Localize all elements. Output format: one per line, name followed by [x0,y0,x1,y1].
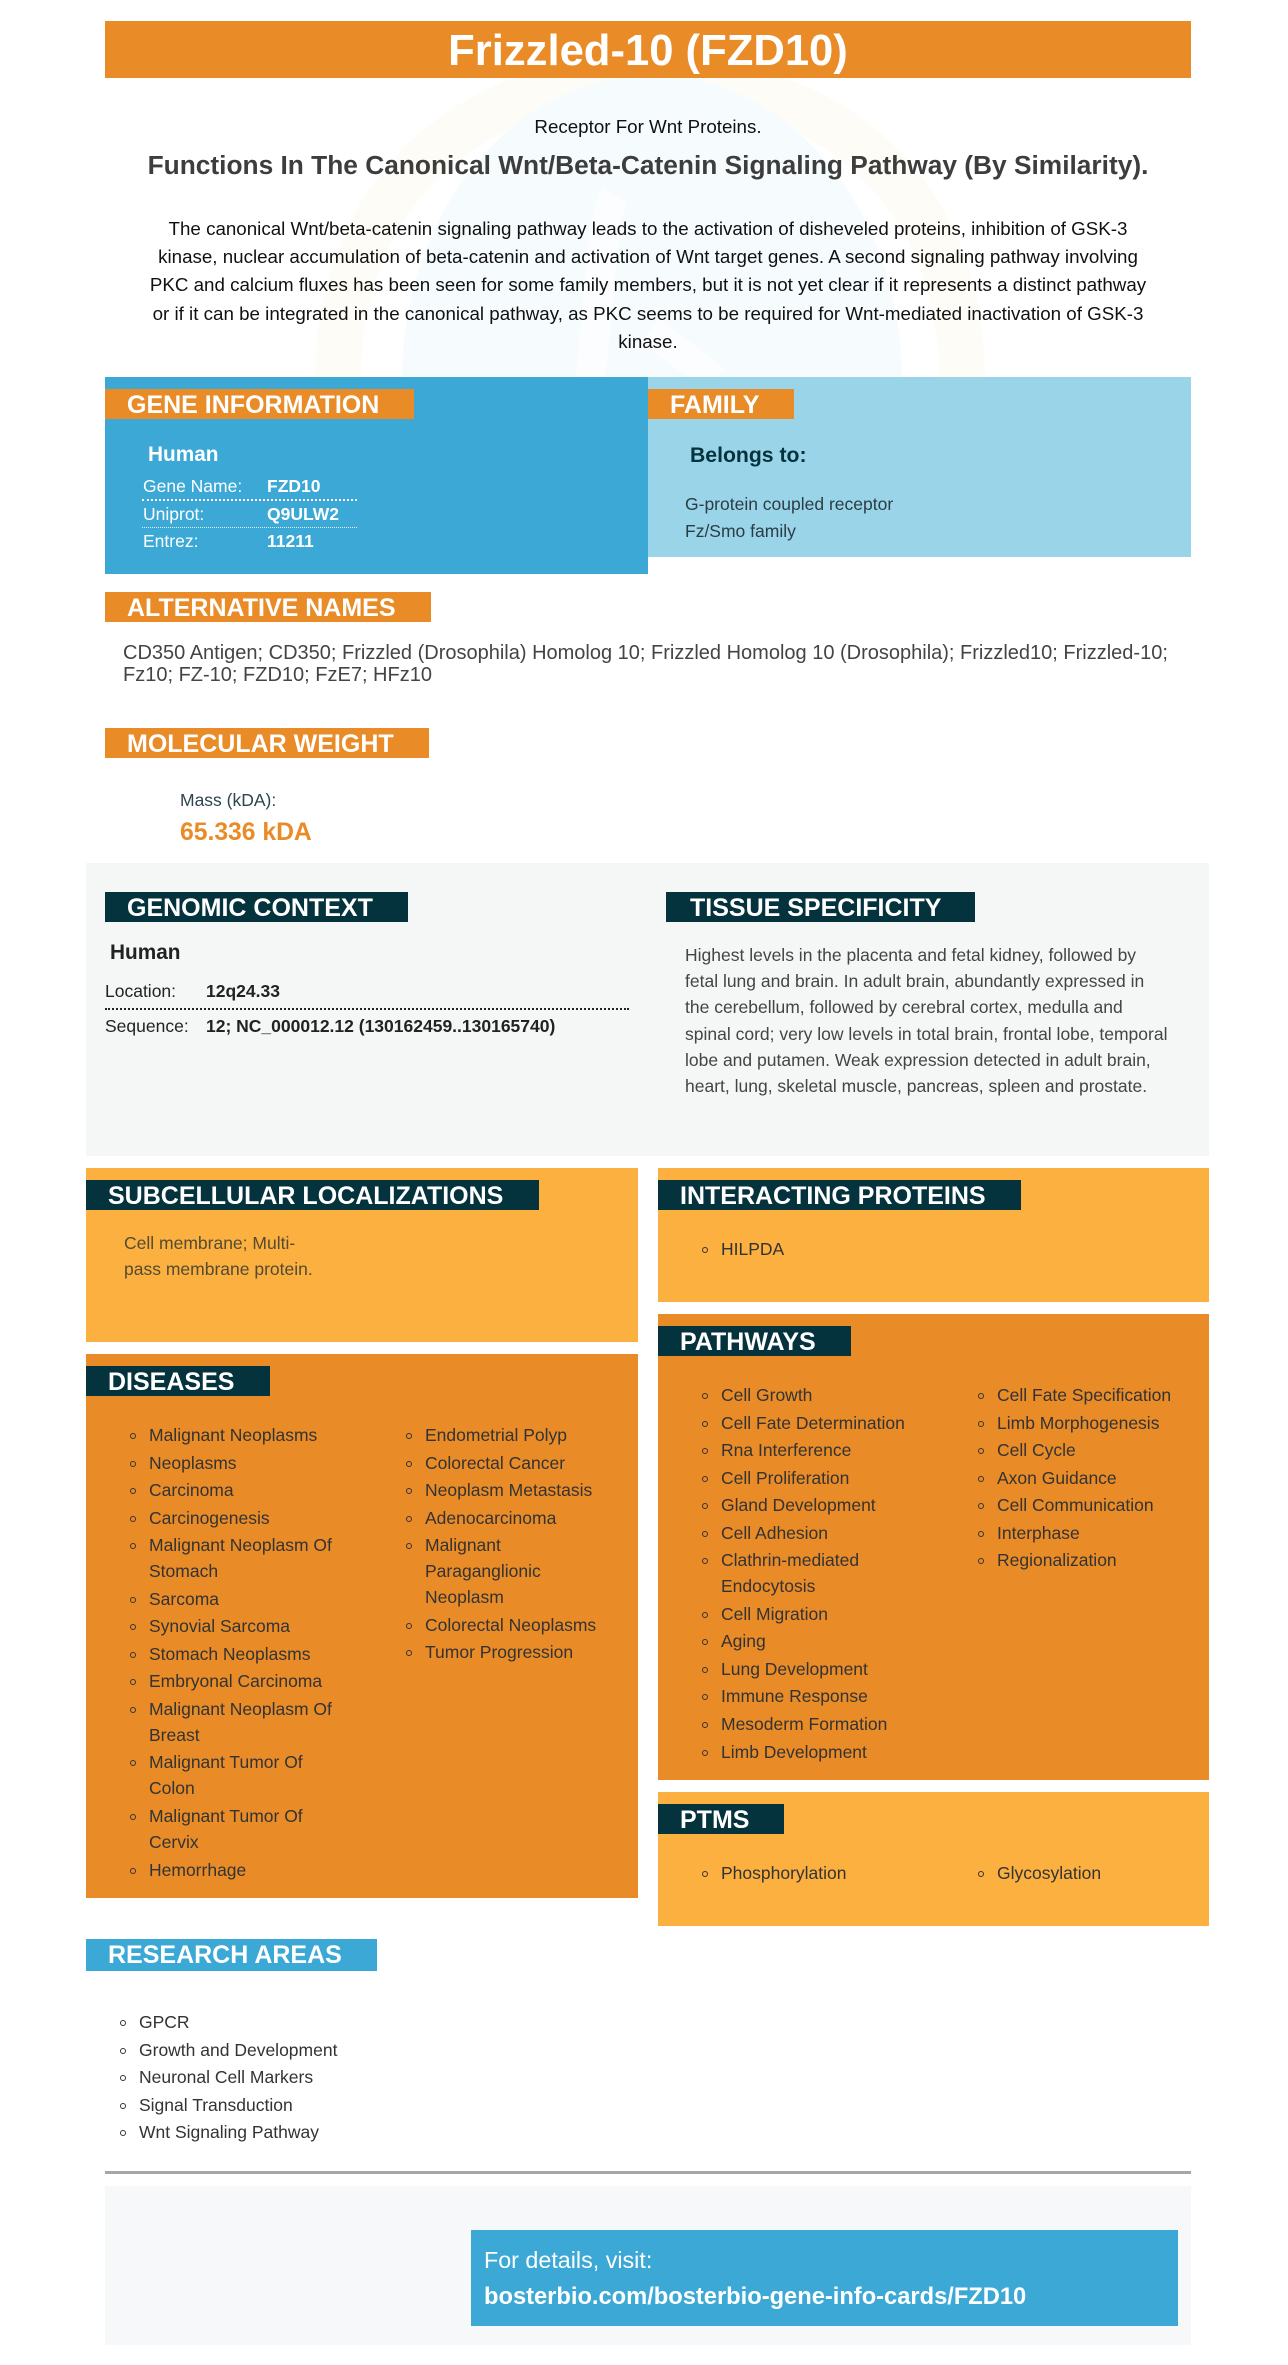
pathway list column 1: Gland Development [721,1495,876,1515]
panel: gene information [105,377,648,574]
localization text [124,1233,313,1279]
location row [105,981,280,1001]
disease list column 2: Neoplasm Metastasis [425,1480,592,1500]
tissue specificity text: spinal cord; very low levels in total brain, frontal lobe, temporal [685,1024,1167,1044]
disease list column 1: Embryonal Carcinoma [149,1671,322,1691]
pathway list column 1: Mesoderm Formation [721,1714,887,1734]
panel: gene information: 11211 [267,531,314,551]
disease list column 1: Neoplasms [149,1453,237,1473]
uniprot row [143,504,339,524]
mass value: 65.336 kDA [180,819,312,846]
disease list column 2: Neoplasm [425,1587,504,1607]
heading: family: FAMILY [670,391,759,419]
heading: subcellular localizations: SUBCELLULAR LOCALIZATIONS [108,1182,503,1210]
panel: pathways [658,1314,1209,1780]
heading: diseases: DISEASES [108,1368,234,1396]
disease list column 1: Malignant Tumor Of [149,1806,303,1826]
pathway list column 2: Limb Morphogenesis [997,1413,1159,1433]
entrez row: Entrez: [143,531,198,551]
pathway list column 1: Cell Growth [721,1385,812,1405]
callout label: For details, visit: [484,2247,652,2273]
research areas list: Neuronal Cell Markers [139,2067,313,2087]
title banner: Frizzled-10 (FZD10) [448,27,848,75]
pathway list column 1: Limb Development [721,1742,867,1762]
alternative names text [123,642,1168,686]
sequence row: Sequence: [105,1016,189,1036]
family list: G-protein coupled receptor [685,494,893,514]
panel: genomic context and tissue specificity: 12q24.33 [206,981,280,1001]
pathway list column 1: Lung Development [721,1659,868,1679]
alternative names text: CD350 Antigen; CD350; Frizzled (Drosophila) Homolog 10; Frizzled Homolog 10 (Drosophila); Frizzled10; Frizzled-10; [123,642,1168,664]
heading: tissue specificity: TISSUE SPECIFICITY [690,894,941,922]
heading: gene information: GENE INFORMATION [127,391,379,419]
panel: genomic context and tissue specificity: 12; NC_000012.12 (130162459..130165740) [206,1016,555,1036]
species: Human [148,443,218,466]
panel: gene information: Q9ULW2 [267,504,339,524]
tissue specificity text [685,945,1167,1096]
panel: diseases [86,1354,638,1898]
pathway list column 1: Clathrin-mediated [721,1550,859,1570]
heading: pathways: PATHWAYS [680,1328,816,1356]
pathway list column 2 [978,1385,1171,1570]
ptm list column 2: Glycosylation [997,1863,1101,1883]
description [150,218,1146,352]
disease list column 1: Malignant Neoplasm Of [149,1699,332,1719]
pathway list column 1: Immune Response [721,1686,868,1706]
research areas list: Signal Transduction [139,2095,293,2115]
disease list column 1: Colon [149,1778,195,1798]
family list [685,494,893,541]
pathway list column 1: Endocytosis [721,1576,815,1596]
panel: gene information: FZD10 [267,476,320,496]
background watermark [316,78,984,377]
panel: footer [105,2186,1191,2345]
tissue specificity text: the cerebellum, followed by cerebral cortex, medulla and [685,997,1123,1017]
entrez row [143,531,314,551]
pathway list column 1: Cell Fate Determination [721,1413,905,1433]
heading: alternative names: ALTERNATIVE NAMES [127,594,396,622]
description: kinase. [618,331,678,352]
callout url: bosterbio.com/bosterbio-gene-info-cards/FZD10 [484,2284,1026,2310]
location row: Location: [105,981,176,1001]
panel: genomic context and tissue specificity [86,863,1209,1156]
disease list column 1: Malignant Neoplasm Of [149,1535,332,1555]
pathway list column 1: Cell Migration [721,1604,828,1624]
description: The canonical Wnt/beta-catenin signaling pathway leads to the activation of disheveled proteins, inhibition of GSK-3 [169,218,1127,239]
heading: molecular weight: MOLECULAR WEIGHT [127,730,394,758]
description: or if it can be integrated in the canonical pathway, as PKC seems to be required for Wnt-mediated inactivation of GSK-3 [153,303,1143,324]
pathway list column 1: Rna Interference [721,1440,851,1460]
protein list: HILPDA [721,1239,784,1259]
pathway list column 2: Cell Cycle [997,1440,1076,1460]
disease list column 1: Hemorrhage [149,1860,246,1880]
callout: details link [471,2230,1178,2326]
disease list column 1: Cervix [149,1832,199,1852]
panel: ptms [658,1792,1209,1926]
disease list column 2: Tumor Progression [425,1642,573,1662]
panel: interacting proteins [658,1168,1209,1302]
disease list column 1: Stomach [149,1561,218,1581]
pathway list column 1 [702,1385,905,1762]
subtitle: Receptor For Wnt Proteins. [534,116,762,137]
disease list column 1: Breast [149,1725,200,1745]
disease list column 2: Paraganglionic [425,1561,541,1581]
heading: interacting proteins: INTERACTING PROTEINS [680,1182,986,1210]
title banner [105,21,1191,78]
disease list column 1: Malignant Neoplasms [149,1425,317,1445]
mass label: Mass (kDA): [180,790,276,810]
panel: family [648,377,1191,557]
gene name row [143,476,320,496]
localization text: Cell membrane; Multi- [124,1233,295,1253]
disease list column 1: Malignant Tumor Of [149,1752,303,1772]
pathway list column 2: Regionalization [997,1550,1117,1570]
disease list column 2: Malignant [425,1535,501,1555]
research areas list: Growth and Development [139,2040,337,2060]
belongs to label: Belongs to: [690,444,807,467]
alternative names text: Fz10; FZ-10; FZD10; FzE7; HFz10 [123,664,432,686]
pathway list column 1: Cell Proliferation [721,1468,849,1488]
disease list column 1: Synovial Sarcoma [149,1616,290,1636]
description: PKC and calcium fluxes has been seen for some family members, but it is not yet clear if it represents a distinct pathway [150,274,1146,295]
disease list column 2 [406,1425,596,1662]
disease list column 2: Colorectal Neoplasms [425,1615,596,1635]
heading: pathways [658,1326,851,1356]
disease list column 1 [130,1425,332,1880]
heading: genomic context: GENOMIC CONTEXT [127,894,373,922]
description: kinase, nuclear accumulation of beta-catenin and activation of Wnt target genes. A second signaling pathway involving [158,246,1138,267]
family list: Fz/Smo family [685,521,796,541]
gene name row: Gene Name: [143,476,242,496]
disease list column 2: Colorectal Cancer [425,1453,565,1473]
pathway list column 1: Cell Adhesion [721,1523,828,1543]
disease list column 1: Carcinogenesis [149,1508,270,1528]
heading: ptms [658,1804,784,1834]
heading: research areas: RESEARCH AREAS [108,1941,342,1969]
tissue specificity text: fetal lung and brain. In adult brain, abundantly expressed in [685,971,1144,991]
panel: subcellular localizations [86,1168,638,1342]
pathway list column 2: Cell Fate Specification [997,1385,1171,1405]
research areas list [120,2012,338,2142]
uniprot row: Uniprot: [143,504,204,524]
tissue specificity text: lobe and putamen. Weak expression detected in adult brain, [685,1050,1151,1070]
pathway list column 2: Axon Guidance [997,1468,1117,1488]
pathway list column 2: Cell Communication [997,1495,1154,1515]
heading: diseases [86,1366,270,1396]
tissue specificity text: Highest levels in the placenta and fetal kidney, followed by [685,945,1136,965]
sequence row [105,1016,555,1036]
pathway list column 1: Aging [721,1631,766,1651]
research areas list: Wnt Signaling Pathway [139,2122,319,2142]
species: Human [110,941,180,964]
disease list column 1: Carcinoma [149,1480,234,1500]
disease list column 2: Endometrial Polyp [425,1425,567,1445]
disease list column 1: Stomach Neoplasms [149,1644,310,1664]
disease list column 2: Adenocarcinoma [425,1508,556,1528]
function heading: Functions In The Canonical Wnt/Beta-Catenin Signaling Pathway (By Similarity). [148,150,1148,180]
heading: ptms: PTMS [680,1806,749,1834]
ptm list column 1: Phosphorylation [721,1863,846,1883]
pathway list column 2: Interphase [997,1523,1080,1543]
localization text: pass membrane protein. [124,1259,313,1279]
heading: family [648,389,794,419]
tissue specificity text: heart, lung, skeletal muscle, pancreas, spleen and prostate. [685,1076,1147,1096]
research areas list: GPCR [139,2012,190,2032]
disease list column 1: Sarcoma [149,1589,219,1609]
